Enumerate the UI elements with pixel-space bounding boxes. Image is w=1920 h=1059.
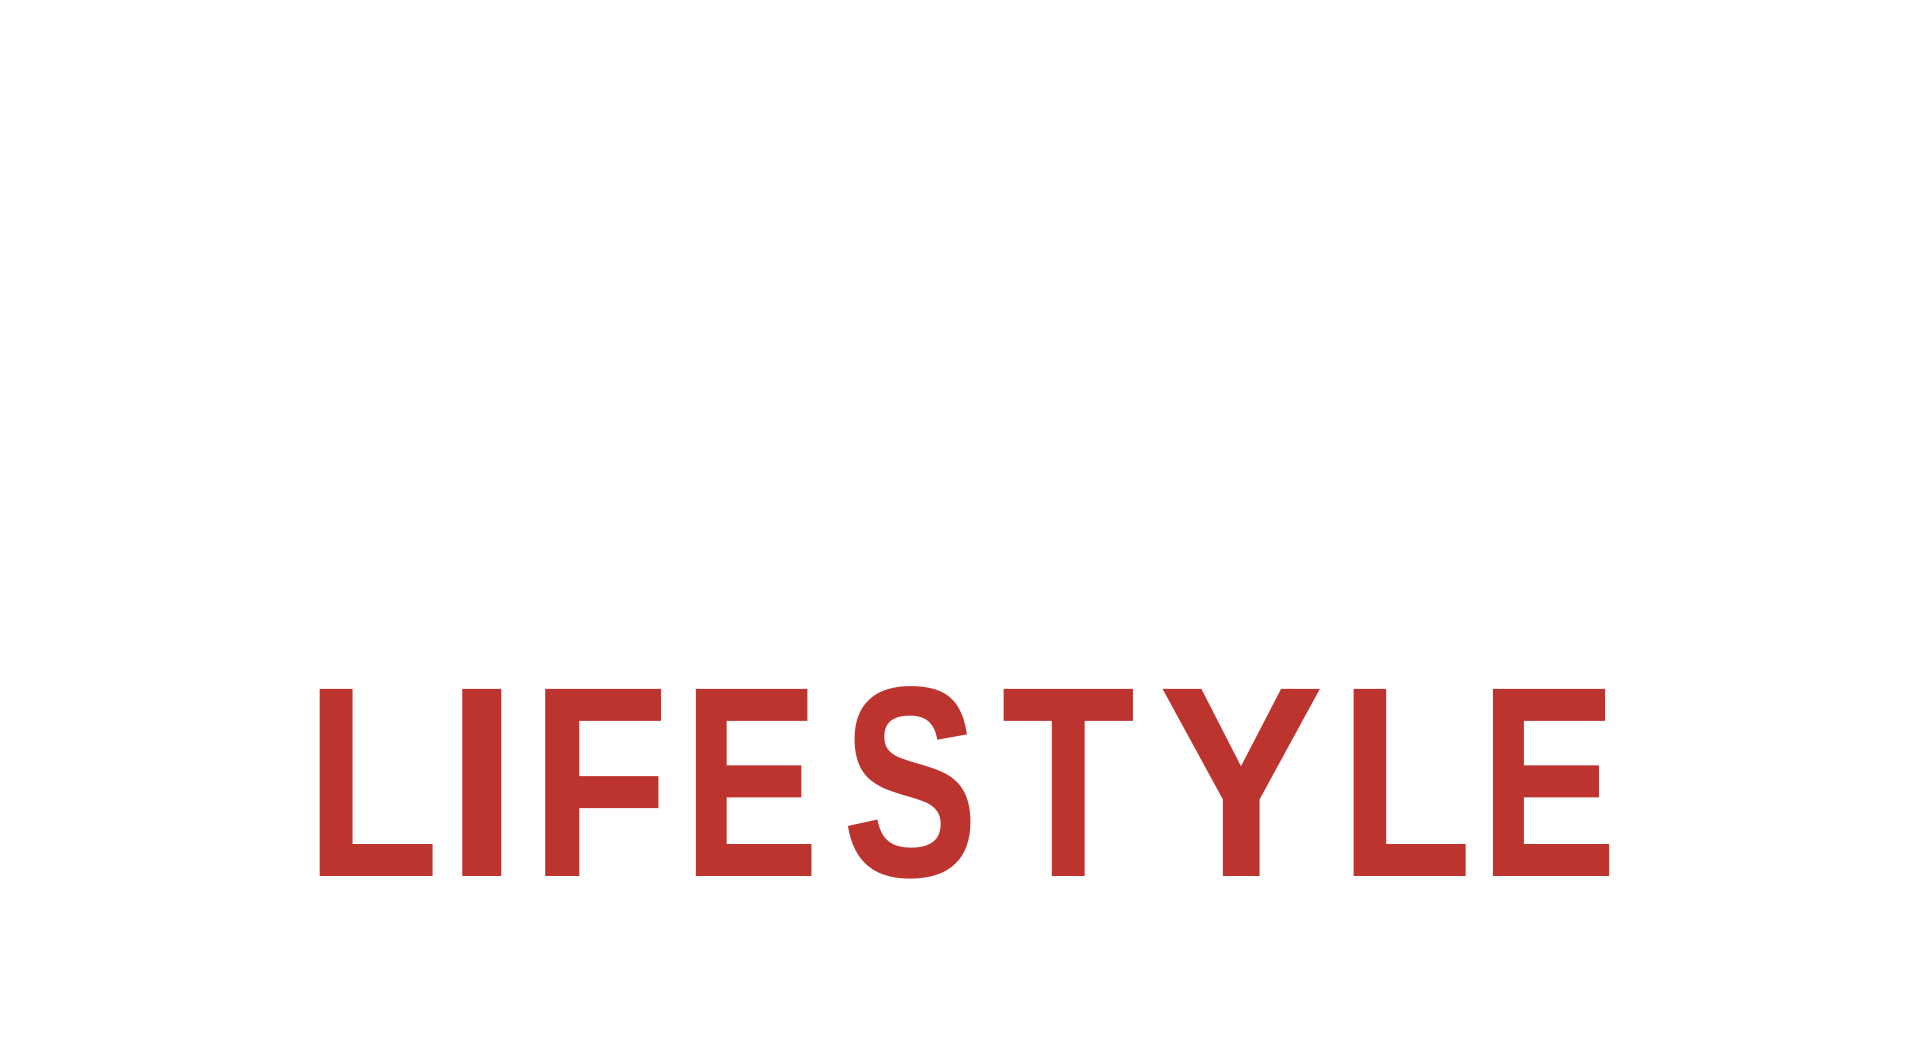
title [306,632,1616,933]
title: S [843,632,978,933]
title: Y [1160,632,1322,933]
title: T [1002,632,1134,933]
title: L [306,632,439,933]
title: F [531,632,669,933]
title: E [683,632,818,933]
title: I [446,632,517,933]
title: E [1480,632,1616,933]
title: L [1340,632,1471,933]
